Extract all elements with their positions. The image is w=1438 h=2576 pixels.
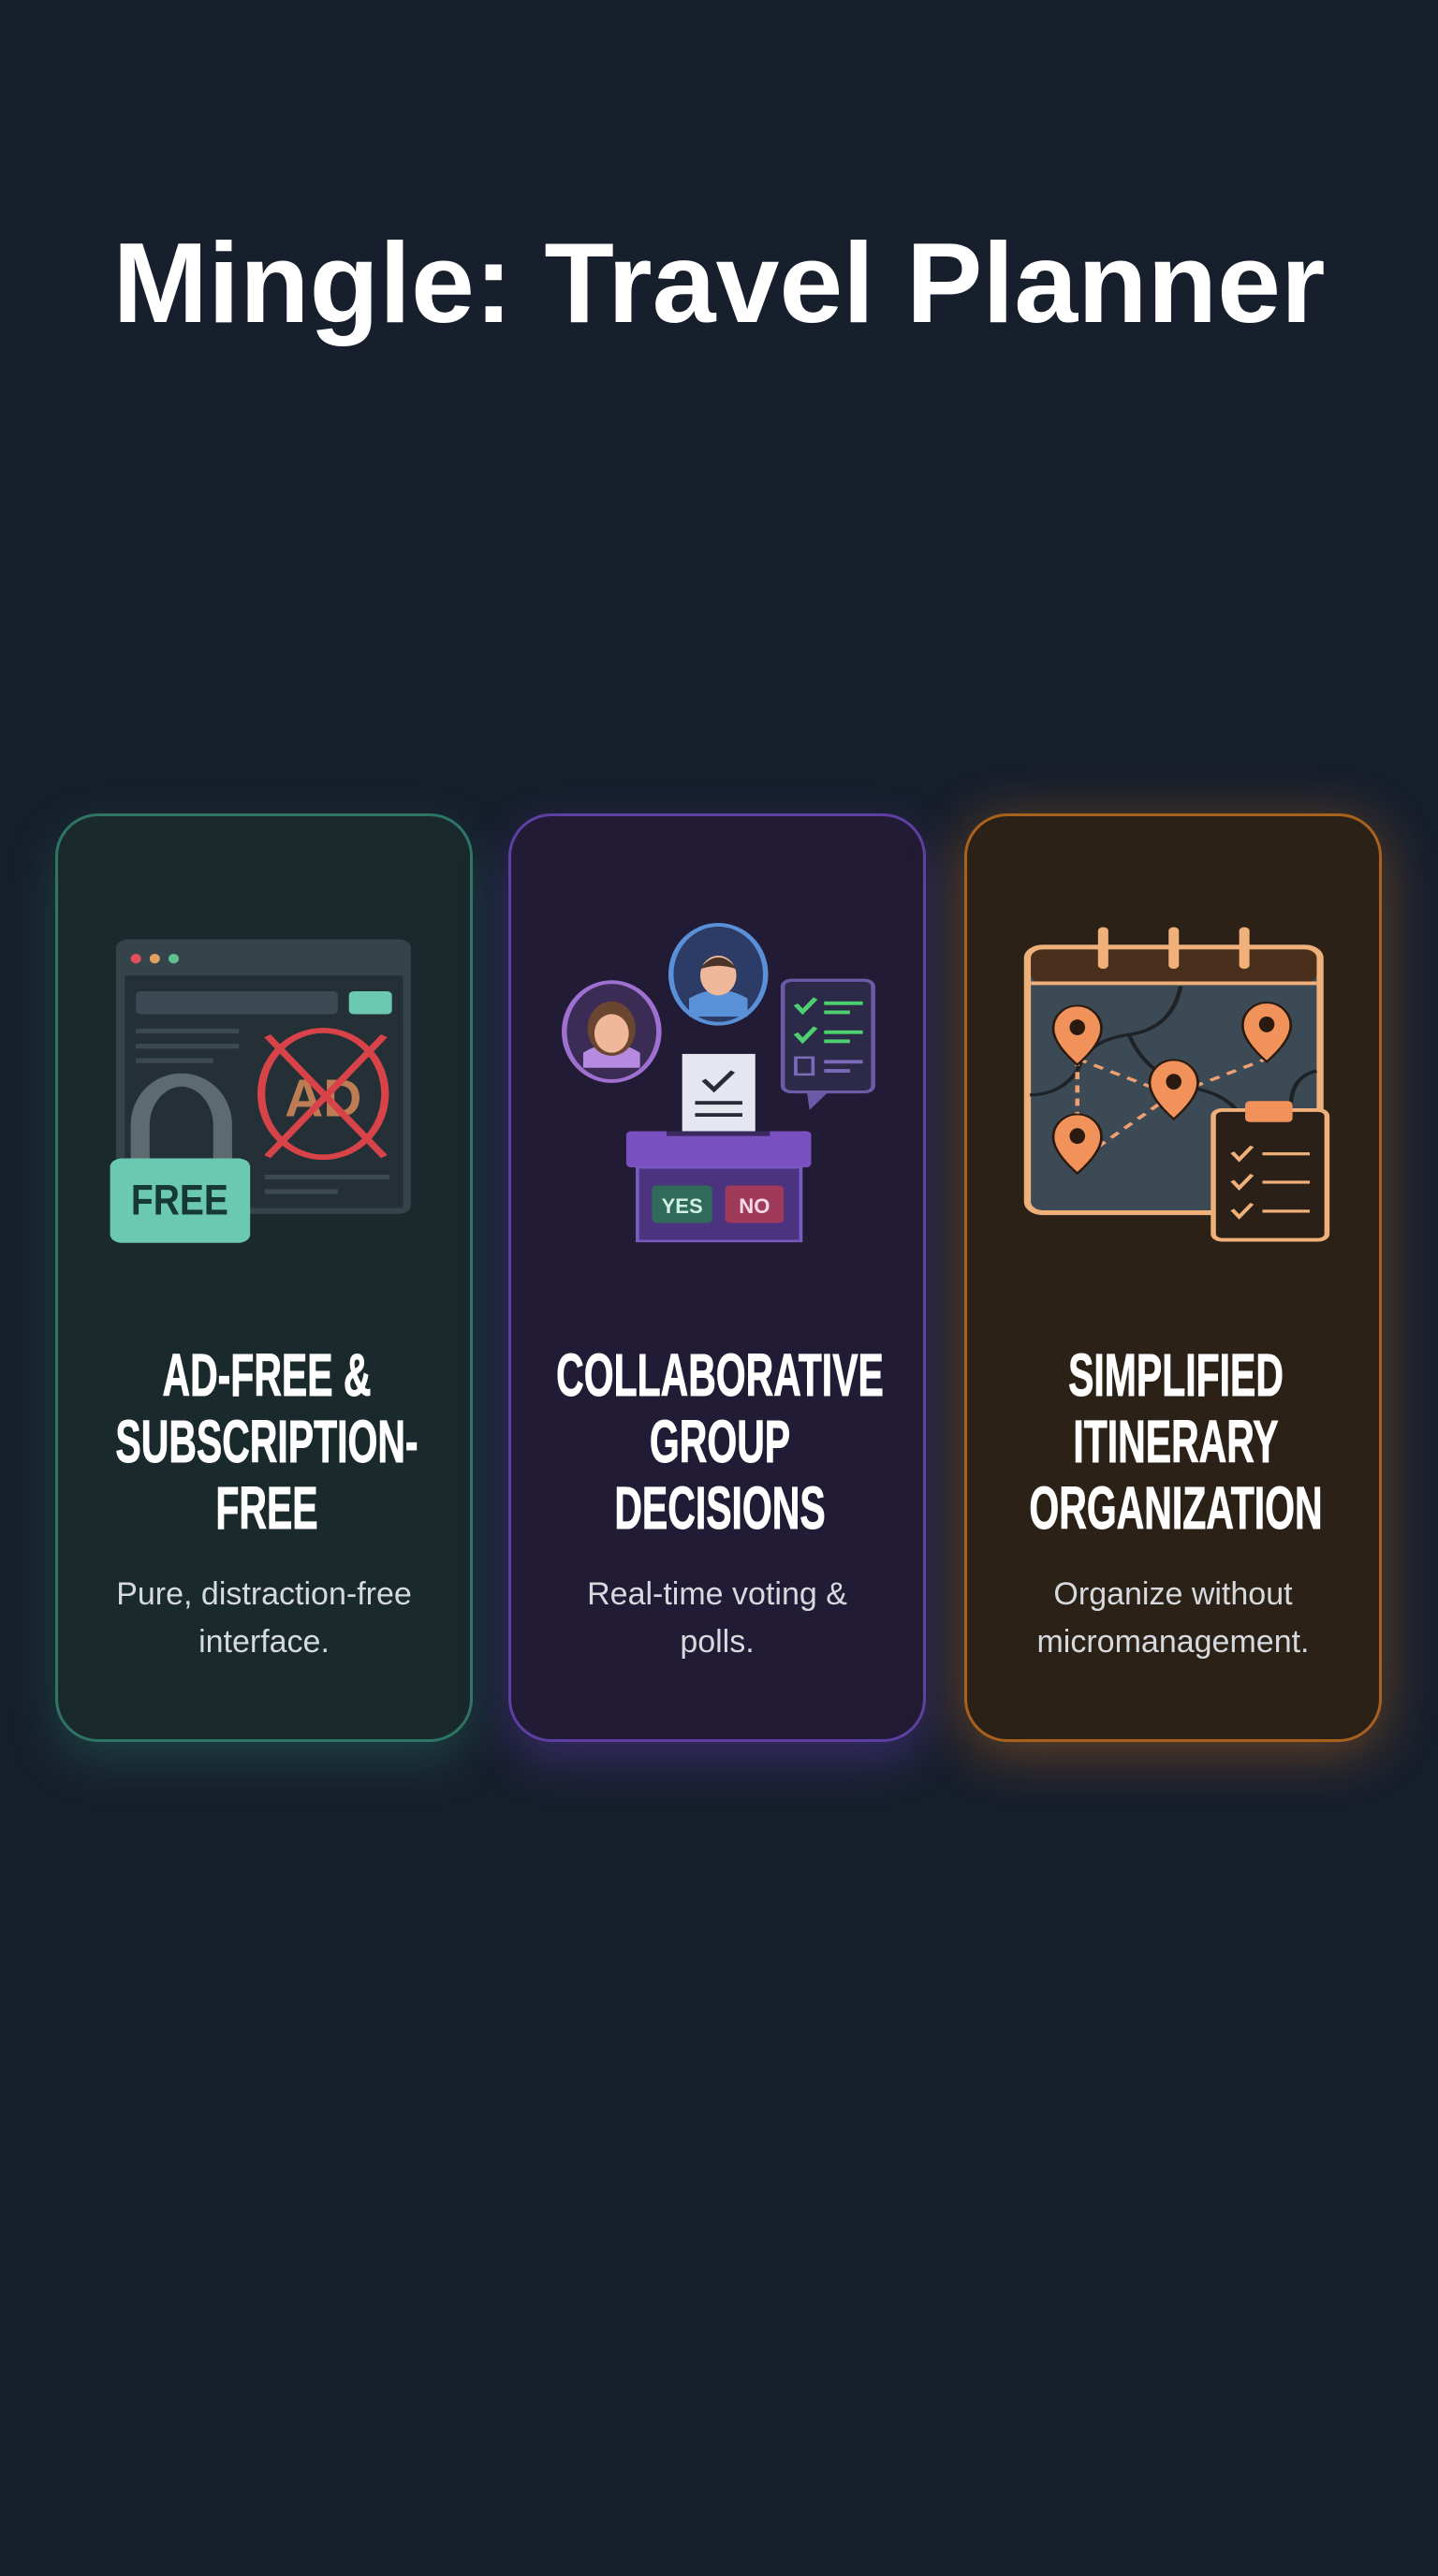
heading: SIMPLIFIED <box>1068 1341 1284 1409</box>
heading <box>1029 1341 1323 1542</box>
description: Organize without <box>1053 1576 1293 1612</box>
panel: itinerary <box>964 813 1382 1742</box>
heading <box>115 1341 418 1542</box>
description: polls. <box>680 1624 755 1660</box>
panel: collaborative decisions <box>508 813 926 1742</box>
icon: browser with no-ad and free lock <box>110 940 411 1243</box>
description <box>116 1576 412 1660</box>
heading: FREE <box>215 1474 318 1542</box>
description <box>587 1576 847 1660</box>
icon: group voting ballot box <box>562 923 875 1243</box>
icon: group voting ballot box: NO <box>739 1194 770 1218</box>
panel: ad-free <box>55 813 473 1742</box>
icon: group voting ballot box: YES <box>662 1194 703 1218</box>
heading <box>556 1341 884 1542</box>
icon: browser with no-ad and free lock: AD <box>285 1069 361 1128</box>
heading: ORGANIZATION <box>1029 1474 1323 1542</box>
heading: COLLABORATIVE <box>556 1341 884 1409</box>
icon: browser with no-ad and free lock: FREE <box>131 1178 228 1224</box>
icon: calendar map with pins and checklist <box>1024 927 1329 1241</box>
description: micromanagement. <box>1036 1624 1309 1660</box>
heading: SUBSCRIPTION- <box>115 1408 418 1475</box>
description <box>1036 1576 1309 1660</box>
heading: AD-FREE & <box>163 1341 371 1409</box>
title: Mingle: Travel Planner <box>113 219 1325 346</box>
heading: ITINERARY <box>1073 1408 1279 1475</box>
description: interface. <box>198 1624 330 1660</box>
description: Real-time voting & <box>587 1576 847 1612</box>
description: Pure, distraction-free <box>116 1576 412 1612</box>
heading: GROUP <box>650 1408 790 1475</box>
heading: DECISIONS <box>614 1474 826 1542</box>
